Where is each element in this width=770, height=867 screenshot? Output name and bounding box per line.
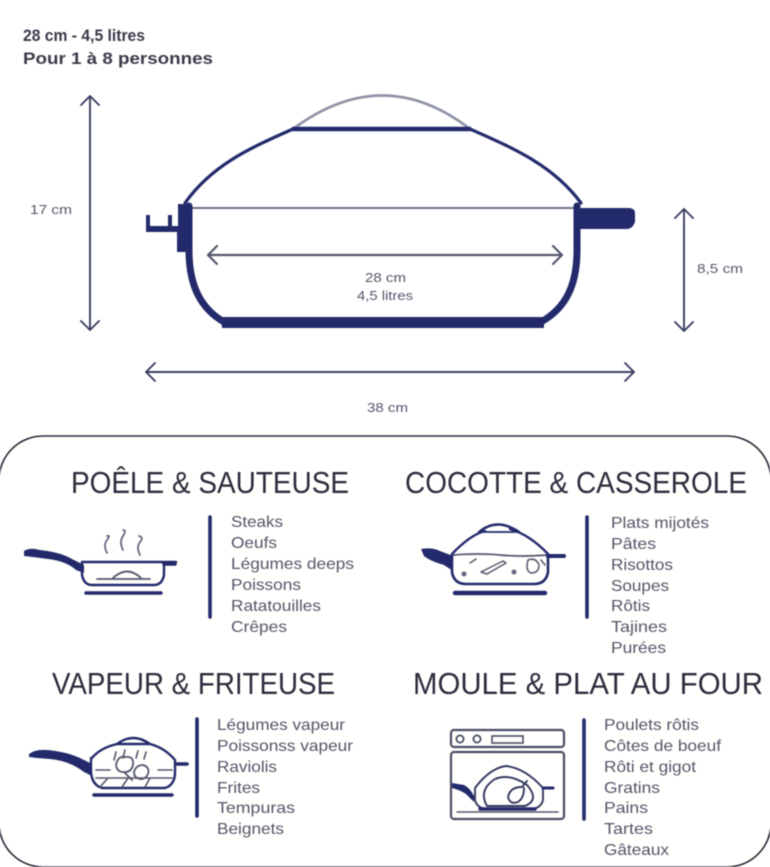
list: cocotte et casserole: Plats mijotés bbox=[611, 515, 709, 532]
list: moule et plat au four: Gratins bbox=[604, 780, 660, 797]
list: cocotte et casserole: Purées bbox=[611, 640, 666, 657]
arrow: inner diameter 28 cm: 28 cm bbox=[365, 270, 406, 285]
list: cocotte et casserole: Rôtis bbox=[611, 598, 650, 615]
title: size and capacity: 28 cm - 4,5 litres bbox=[23, 26, 145, 45]
list: vapeur et friteuse: Tempuras bbox=[217, 800, 295, 817]
list: moule et plat au four: Tartes bbox=[604, 821, 653, 838]
list: moule et plat au four: Poulets rôtis bbox=[604, 717, 699, 734]
icon: oven with roast chicken bbox=[451, 730, 564, 819]
list: moule et plat au four: Gâteaux bbox=[604, 842, 669, 859]
list: cocotte et casserole: Tajines bbox=[611, 619, 667, 636]
list: poêle et sauteuse bbox=[231, 514, 354, 636]
arrow: inner diameter 28 cm: 4,5 litres bbox=[357, 288, 414, 303]
divider bbox=[208, 517, 212, 617]
heading: vapeur et friteuse: VAPEUR & FRITEUSE bbox=[52, 666, 335, 701]
title: size and capacity bbox=[23, 26, 213, 68]
heading: poêle et sauteuse: POÊLE & SAUTEUSE bbox=[71, 465, 349, 500]
list: moule et plat au four bbox=[604, 717, 722, 859]
title: size and capacity: Pour 1 à 8 personnes bbox=[23, 49, 213, 68]
list: vapeur et friteuse: Raviolis bbox=[217, 759, 277, 776]
list: cocotte et casserole: Pâtes bbox=[611, 536, 656, 553]
list: moule et plat au four: Pains bbox=[604, 800, 648, 817]
list: cocotte et casserole: Soupes bbox=[611, 578, 669, 595]
arrow: height 17 cm: 17 cm bbox=[30, 202, 72, 217]
lid knob dome bbox=[293, 96, 470, 129]
list: poêle et sauteuse: Poissons bbox=[231, 577, 301, 594]
list: vapeur et friteuse: Poissonss vapeur bbox=[217, 738, 354, 755]
arrow: depth 8,5 cm bbox=[675, 209, 743, 331]
lid bbox=[185, 129, 581, 203]
list: moule et plat au four: Côtes de boeuf bbox=[604, 738, 722, 755]
divider bbox=[582, 720, 586, 819]
icon: casserole bbox=[421, 524, 564, 593]
list: cocotte et casserole: Risottos bbox=[611, 557, 673, 574]
divider bbox=[585, 517, 589, 617]
list: vapeur et friteuse: Frites bbox=[217, 780, 260, 797]
pan body walls bbox=[189, 206, 577, 322]
rim line bbox=[184, 207, 580, 209]
list: poêle et sauteuse: Légumes deeps bbox=[231, 556, 354, 573]
list: poêle et sauteuse: Crêpes bbox=[231, 619, 287, 636]
pan base bbox=[221, 317, 544, 328]
icon: frying pan bbox=[24, 530, 176, 593]
list: vapeur et friteuse: Beignets bbox=[217, 821, 284, 838]
arrow: total width 38 cm: 38 cm bbox=[367, 400, 408, 415]
arrow: depth 8,5 cm: 8,5 cm bbox=[697, 261, 743, 276]
icon: steamer bbox=[29, 738, 187, 795]
list: poêle et sauteuse: Steaks bbox=[231, 514, 283, 531]
list: poêle et sauteuse: Ratatouilles bbox=[231, 598, 321, 615]
list: vapeur et friteuse bbox=[217, 717, 354, 838]
list: poêle et sauteuse: Oeufs bbox=[231, 535, 277, 552]
right handle bbox=[574, 208, 635, 229]
arrow: height 17 cm bbox=[30, 96, 99, 330]
diagram: pan side view bbox=[146, 96, 635, 328]
list: moule et plat au four: Rôti et gigot bbox=[604, 759, 697, 776]
arrow: total width 38 cm bbox=[146, 363, 634, 415]
panel: uses bbox=[0, 436, 770, 867]
list: vapeur et friteuse: Légumes vapeur bbox=[217, 717, 346, 734]
arrow: inner diameter 28 cm bbox=[208, 246, 562, 303]
list: cocotte et casserole bbox=[611, 515, 709, 657]
divider bbox=[195, 719, 199, 816]
